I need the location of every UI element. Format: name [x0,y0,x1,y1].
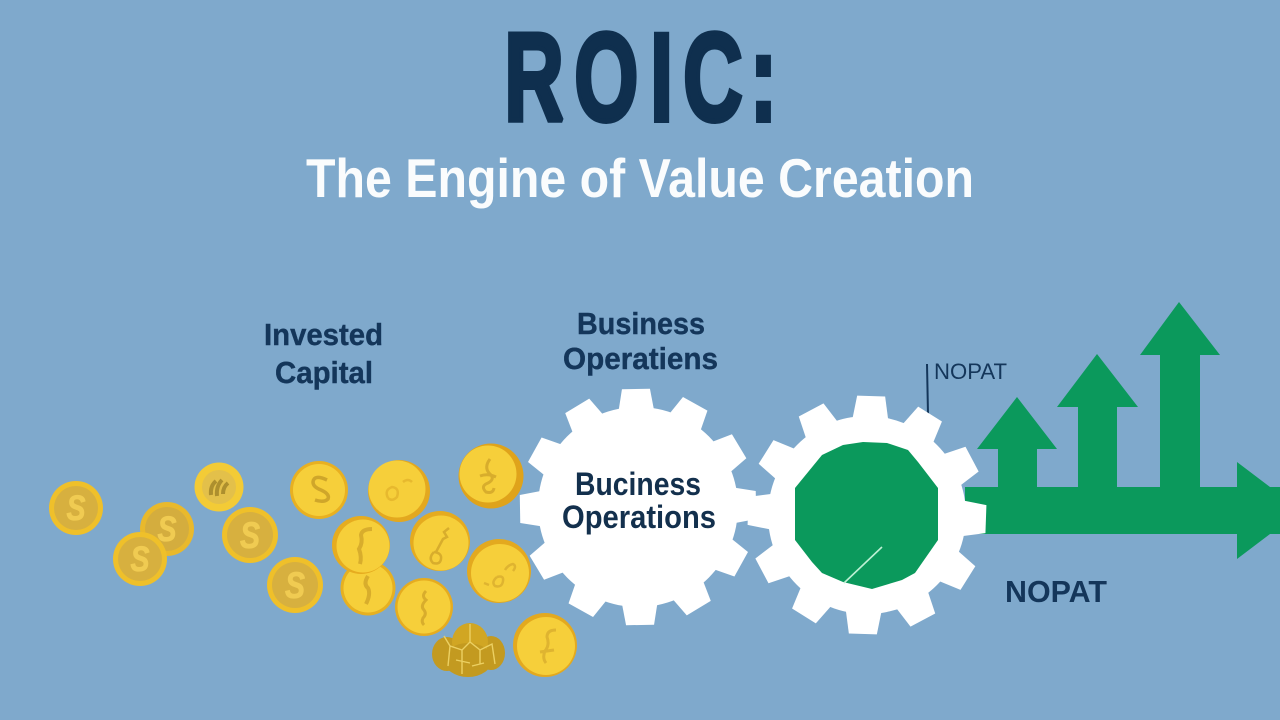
gear text: Operations [562,499,716,535]
tall up arrow [1140,302,1220,488]
gear core highlight [844,547,882,583]
NOPAT leader line [927,364,928,414]
label: business operations: Business [577,306,705,341]
coin 2 [140,502,194,556]
label: business operations: Operatiens [563,341,718,376]
label: invested capital [264,317,383,390]
coin 15 [513,613,577,677]
coin 12 [410,511,470,571]
coin 11 [332,516,390,574]
coin 5: S [240,515,260,556]
large NOPAT label: NOPAT [1005,574,1107,609]
gear: output [744,392,990,638]
title: C [683,8,743,148]
gear bridge [735,497,775,520]
label: invested capital: Invested [264,317,383,352]
coin 5 [222,507,278,563]
growth arrows [965,302,1280,559]
coin 10 [340,560,396,616]
coin 4 [194,462,244,512]
gear: business operations [518,387,775,627]
title: I [650,8,673,148]
gear text [562,466,716,535]
coin 8 [368,460,430,522]
main horizontal arrow [965,462,1280,559]
coin 3: S [130,540,150,579]
coin pile [432,623,505,677]
subtitle: The Engine of Value Creation [306,147,974,209]
coin 14 [395,578,453,636]
coin 13 [467,539,531,603]
coin 6 [267,557,323,613]
small up arrow [977,397,1057,488]
coin 6: S [285,565,305,606]
gear text: Buciness [575,466,701,502]
title: R [504,8,564,148]
title: O [574,8,638,148]
coin 3 [113,532,167,586]
coins: invested capital [49,444,577,677]
coin 2: S [158,510,176,549]
coin 9 [458,444,524,508]
coin 7 [290,461,348,519]
label: business operations [563,306,718,376]
coin 1: S [66,489,86,528]
medium up arrow [1057,354,1138,488]
green gear core [795,442,938,589]
label: invested capital: Capital [275,355,373,390]
small NOPAT label: NOPAT [934,359,1007,384]
coin 1 [49,481,103,535]
title: : [750,8,777,148]
